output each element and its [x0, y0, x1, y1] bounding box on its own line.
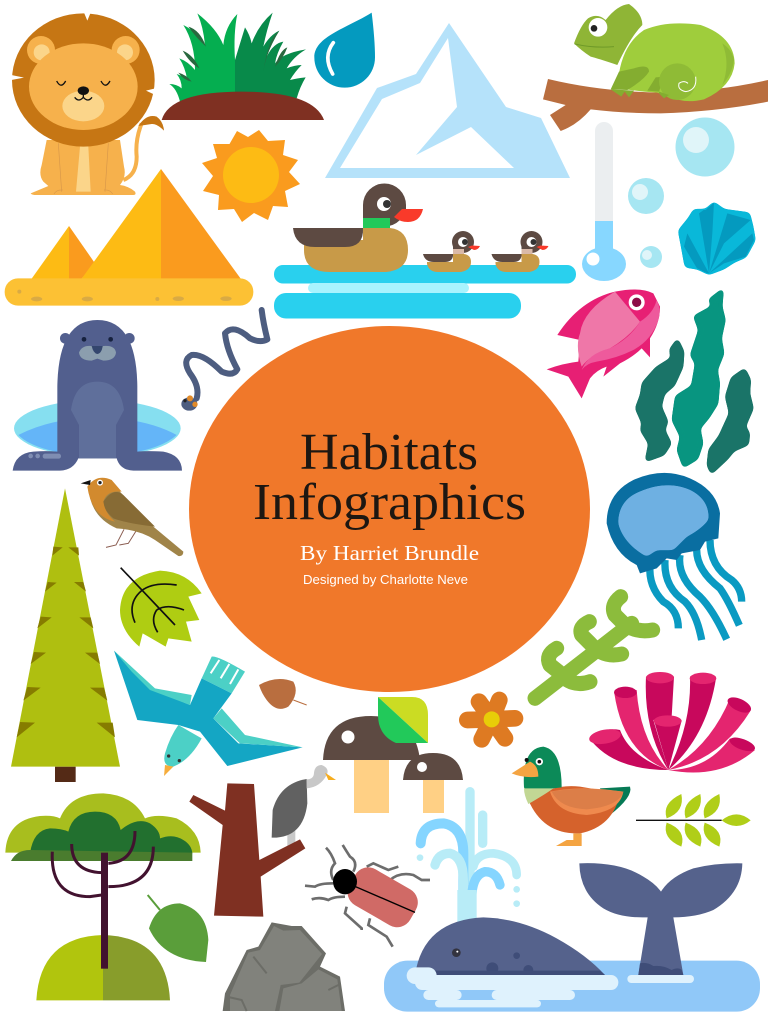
title: Habitats	[300, 424, 478, 481]
icon: pyramids on sand	[5, 169, 253, 306]
icon: pink fish	[547, 290, 660, 398]
icon: rock	[223, 922, 345, 1011]
icon: leafy sprig	[636, 794, 751, 847]
icon: kelp	[637, 291, 752, 472]
icon: vulture on tree trunk	[189, 765, 336, 917]
icon: whale and water	[384, 863, 760, 1012]
icon: grass on mound	[162, 13, 324, 120]
icon: iceberg	[325, 23, 570, 178]
icon: robin	[81, 478, 183, 556]
icon: duckling one	[423, 231, 480, 272]
icon: lime leaf	[120, 568, 202, 647]
title: Infographics	[253, 474, 526, 531]
icon: seashell	[679, 203, 755, 274]
icon: brown leaf	[259, 679, 307, 709]
icon: orange flower	[467, 700, 515, 739]
icon: mallard duck	[512, 747, 630, 846]
icon: bubbles	[628, 118, 734, 268]
icon: beetle	[305, 845, 430, 947]
icon: pink coral	[588, 672, 757, 772]
icon: mushrooms with leaf	[323, 697, 463, 813]
icon: duckling two	[492, 231, 548, 272]
icon: jellyfish	[607, 473, 742, 640]
icon: green seaweed	[535, 597, 653, 698]
icon: water drop	[314, 13, 375, 88]
icon: green leaf	[148, 895, 208, 962]
title	[253, 424, 526, 531]
icon: chameleon on branch	[543, 4, 768, 131]
icon: lion	[11, 13, 164, 195]
icon: sun	[202, 130, 300, 222]
icon: adult duck	[293, 184, 423, 272]
icon: acacia tree on hill	[5, 793, 201, 1000]
icon: water under ducks	[274, 265, 576, 318]
icon: snake	[181, 310, 267, 411]
icon: otter in pool	[13, 320, 182, 471]
author line: By Harriet Brundle	[300, 541, 479, 565]
icon: water fountain	[417, 792, 520, 923]
main circle with title	[189, 326, 590, 692]
icon: thermometer	[582, 122, 626, 281]
icon: blue bird	[114, 651, 303, 776]
icon: fir tree	[11, 488, 120, 782]
designer credit: Designed by Charlotte Neve	[303, 573, 468, 587]
